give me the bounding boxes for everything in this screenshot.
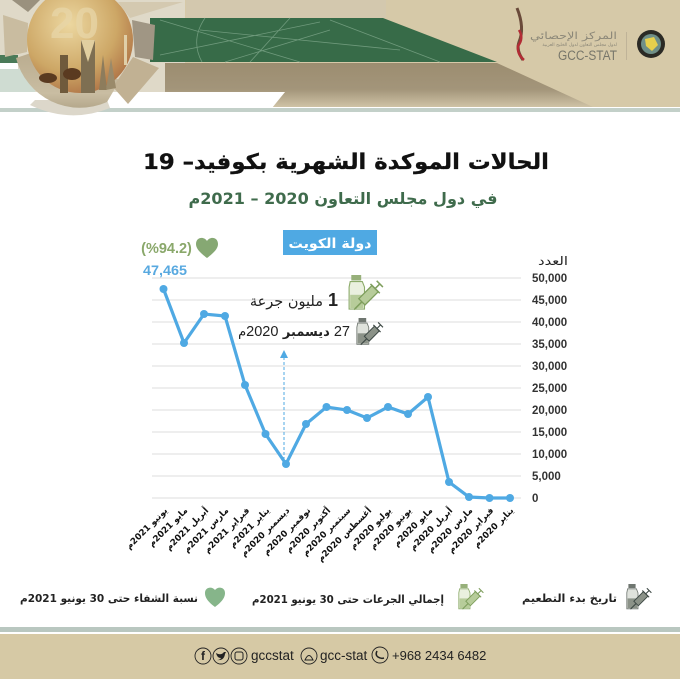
country label box [283, 230, 377, 255]
GCC emblem [637, 30, 665, 58]
y axis labels: 0 [532, 493, 538, 505]
legend: recovery rate [20, 588, 225, 607]
x axis labels: يوليو 2020م [348, 506, 394, 552]
footer: gccstat [251, 648, 294, 663]
recovery rate [141, 238, 218, 258]
x axis labels: يونيو 2021م [124, 506, 170, 552]
arrow: vaccination start [280, 350, 288, 460]
data line [164, 289, 510, 498]
logo latin name: GCC-STAT [558, 48, 617, 63]
callout: vaccination date [238, 318, 384, 348]
y axis labels: 30,000 [532, 361, 567, 373]
legend: total doses: إجمالي الجرعات حتى 30 يونيو 2021م [252, 593, 444, 606]
date text: 27 ديسمبر 2020م [238, 324, 350, 340]
x axis labels: مايو 2021م [147, 506, 190, 549]
footer: +968 2434 6482 [392, 648, 486, 663]
x axis labels: نوفمبر 2020م [262, 506, 313, 558]
y axis labels: 5,000 [532, 471, 561, 483]
peak value: 47,465 [143, 263, 188, 278]
x axis labels: سبتمبر 2020م [301, 506, 353, 558]
line chart [124, 254, 568, 564]
x axis labels: فبراير 2021م [203, 506, 252, 555]
x axis labels: ديسمبر 2020م [239, 506, 292, 559]
logo ribbon [517, 8, 523, 60]
data points [160, 285, 514, 502]
header medallion with skyline [3, 0, 183, 115]
x axis labels: أغسطس 2020م [315, 505, 374, 564]
logo subtitle: لدول مجلس التعاون لدول الخليج العربية [542, 43, 617, 48]
subtitle: في دول مجلس التعاون 2020 – 2021م [188, 189, 497, 209]
y axis labels: 25,000 [532, 383, 567, 395]
x axis labels: فبراير 2020م [447, 506, 496, 555]
y axis labels: 10,000 [532, 449, 567, 461]
legend: vaccination start: تاريخ بدء التطعيم [522, 592, 617, 605]
y axis labels: 45,000 [532, 295, 567, 307]
country label box: دولة الكويت [288, 236, 372, 252]
y axis title: العدد [538, 254, 568, 268]
x axis labels: يناير 2021م [228, 506, 272, 550]
icon: grey vaccine [357, 318, 384, 348]
recovery percent: (%94.2) [141, 241, 192, 257]
logo ribbon colors [518, 30, 524, 60]
y axis labels [532, 273, 567, 505]
legend: total doses [252, 584, 485, 613]
x axis labels: مايو 2020م [392, 506, 435, 549]
x axis labels: أبريل 2021م [163, 505, 211, 553]
y axis labels: 50,000 [532, 273, 567, 285]
icon: heart [196, 238, 218, 258]
footer [0, 627, 680, 679]
y axis labels: 20,000 [532, 405, 567, 417]
GCC-STAT logo [517, 8, 665, 63]
x axis labels: أكتوبر 2020م [283, 505, 333, 555]
legend [20, 584, 653, 613]
y axis labels: 35,000 [532, 339, 567, 351]
title: الحالات الموكدة الشهرية بكوفيد– 19 [143, 150, 549, 175]
x axis labels [124, 505, 516, 564]
header banner [0, 0, 680, 112]
x axis labels: أبريل 2020م [407, 505, 455, 553]
x axis labels: يونيو 2020م [368, 506, 414, 552]
icon: green vaccine [349, 275, 384, 314]
x axis labels: يناير 2020م [472, 506, 516, 550]
doses text: 1 مليون جرعة [250, 290, 338, 310]
y axis labels: 15,000 [532, 427, 567, 439]
logo Arabic name: المركز الإحصائي [530, 31, 617, 42]
x axis labels: مارس 2021م [182, 506, 231, 555]
header medallion with skyline: 20 [50, 0, 99, 48]
x axis labels: مارس 2020م [426, 506, 475, 555]
footer: f [201, 649, 206, 663]
callout: total doses [250, 275, 384, 314]
social icons [195, 647, 388, 664]
legend: recovery rate: نسبة الشفاء حتى 30 يونيو 2021م [20, 592, 198, 605]
footer: gcc-stat [320, 648, 368, 663]
legend: vaccination start [522, 584, 653, 613]
y axis labels: 40,000 [532, 317, 567, 329]
